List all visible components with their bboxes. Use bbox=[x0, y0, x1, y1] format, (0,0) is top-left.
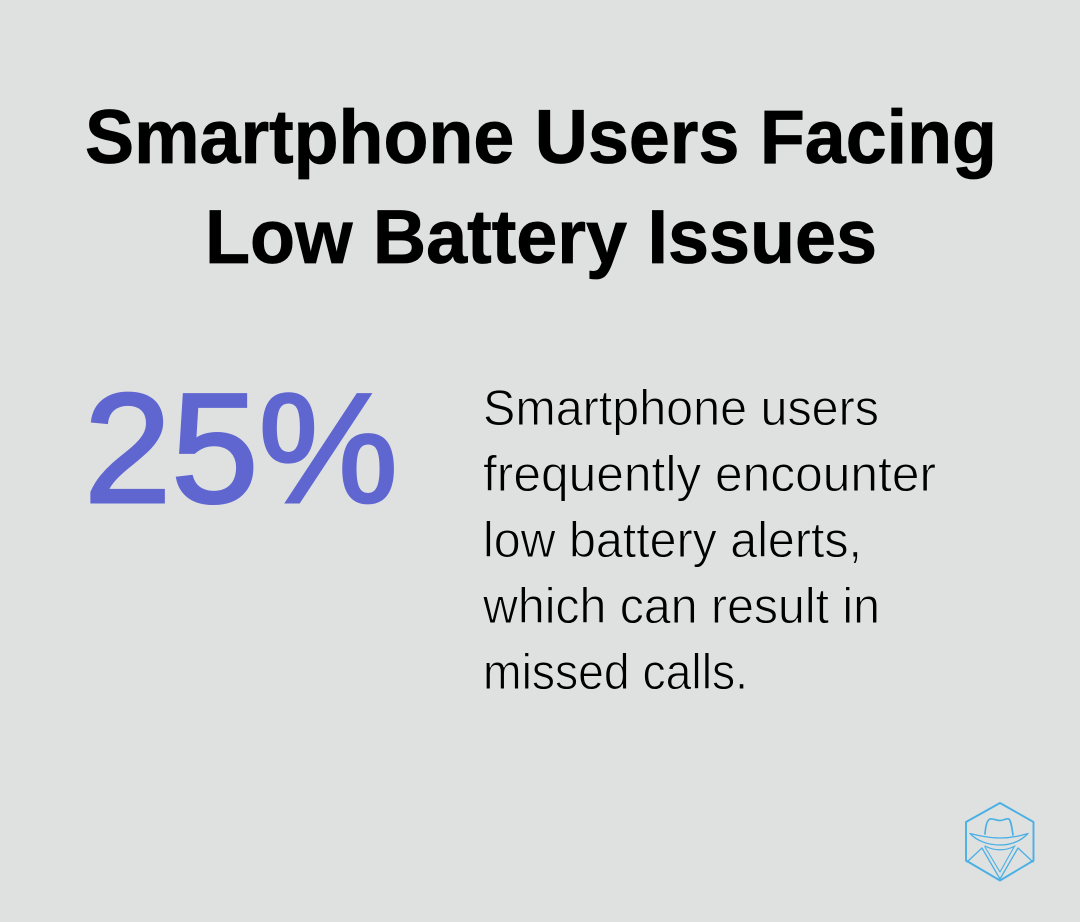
description text: low battery alerts, bbox=[483, 512, 862, 568]
description text bbox=[482, 380, 936, 700]
description text: missed calls. bbox=[483, 644, 748, 700]
big statistic: 25%: 25% bbox=[84, 362, 398, 536]
description text: Smartphone users bbox=[483, 380, 879, 436]
title bbox=[85, 95, 997, 280]
description text: frequently encounter bbox=[483, 446, 936, 502]
description text: which can result in bbox=[482, 578, 880, 634]
title: Low Battery Issues bbox=[205, 195, 877, 280]
icon: spy logo in hexagon bbox=[966, 803, 1034, 880]
title: Smartphone Users Facing bbox=[85, 95, 997, 180]
